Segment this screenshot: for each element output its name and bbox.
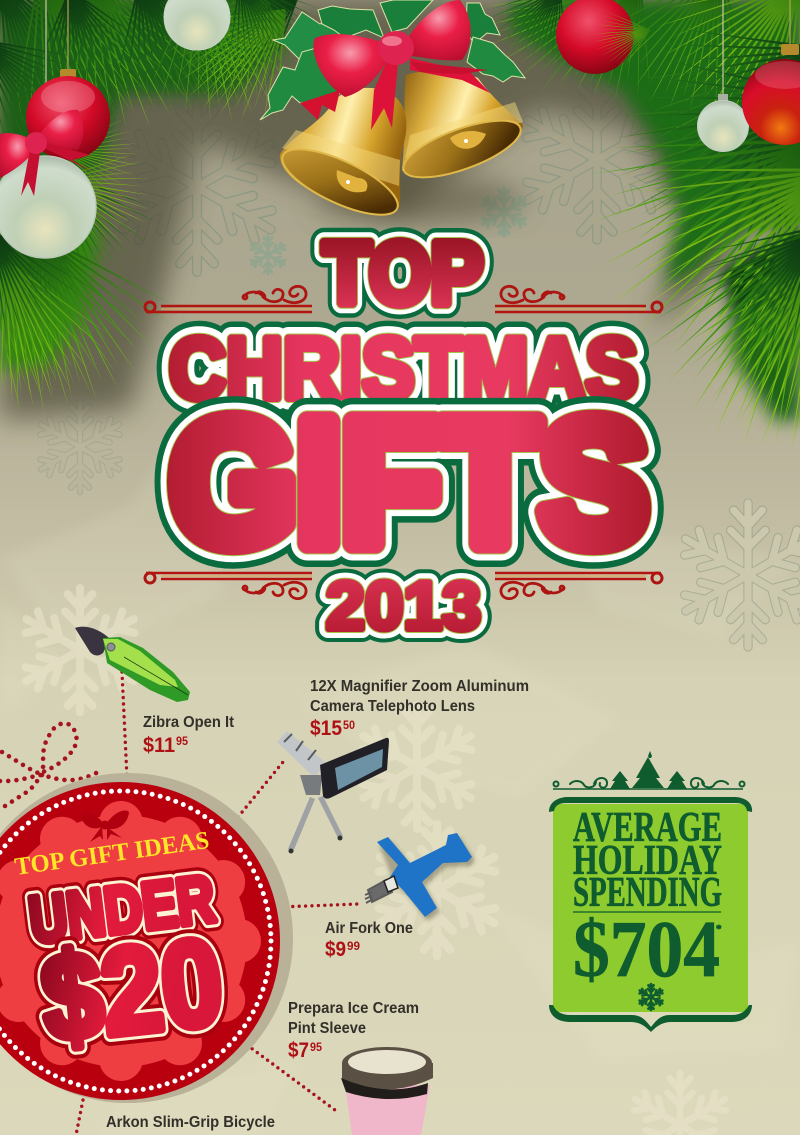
pine branches: top left <box>0 0 341 200</box>
scalloped inner panel <box>0 801 261 1081</box>
text: AVERAGE HOLIDAY SPENDING: HOLIDAY <box>573 838 722 884</box>
heading: CHRISTMAS: CHRISTMAS <box>169 321 638 417</box>
card bottom frame <box>549 1005 752 1032</box>
label: lens: Camera Telephoto Lens <box>310 698 475 715</box>
title: TOP CHRISTMAS GIFTS 2013 <box>169 225 648 644</box>
label: Zibra Open It: $11 <box>143 734 175 757</box>
heading: GIFTS: GIFTS <box>170 385 648 581</box>
label: Air Fork One: 99 <box>347 941 360 953</box>
label: Air Fork One: $9 <box>325 938 346 961</box>
holly leaves <box>260 0 525 120</box>
text: AVERAGE HOLIDAY SPENDING <box>573 805 722 916</box>
text: UNDER: UNDER <box>25 861 219 957</box>
label: Prepara Ice Cream Pint Sleeve: Pint Sleeve <box>288 1020 366 1037</box>
label: Prepara Ice Cream Pint Sleeve <box>288 1000 419 1062</box>
ornament: silver ball left <box>0 156 96 258</box>
bell: left <box>274 88 406 228</box>
heading: GIFTS: GIFTS <box>170 385 648 581</box>
text: $20: $20 <box>35 913 229 1067</box>
shadows under foliage <box>0 0 800 420</box>
badge: top gift ideas under $20 <box>0 773 293 1103</box>
label: lens: 50 <box>343 720 355 732</box>
text: TOP GIFT IDEAS: TOP GIFT IDEAS <box>13 827 211 881</box>
label: Prepara Ice Cream Pint Sleeve: $7 <box>288 1039 309 1062</box>
dotted connectors <box>76 672 358 1135</box>
label: Arkon: Arkon Slim-Grip Bicycle <box>106 1114 275 1131</box>
product: air fork one <box>365 833 475 921</box>
heading: TOP: TOP <box>323 225 483 322</box>
label: Prepara Ice Cream Pint Sleeve: 95 <box>310 1042 323 1054</box>
heading: CHRISTMAS: CHRISTMAS <box>169 321 638 417</box>
icon: snowflake <box>638 984 664 1010</box>
card top frame <box>549 797 752 812</box>
label: Zibra Open It <box>143 714 235 757</box>
text: UNDER: UNDER <box>25 861 219 957</box>
ornament: silver ball right <box>698 94 748 152</box>
heading: TOP: TOP <box>323 225 483 322</box>
icon: bow <box>81 810 129 842</box>
product: pruner <box>75 627 190 702</box>
label: Zibra Open It: 95 <box>176 736 189 748</box>
heading: GIFTS: GIFTS <box>170 385 648 581</box>
product: ice cream pint sleeve <box>341 1047 433 1135</box>
red bow on bells <box>300 0 490 130</box>
panel: average holiday spending <box>549 751 752 1032</box>
heading: CHRISTMAS: CHRISTMAS <box>169 321 638 417</box>
heading: TOP: TOP <box>323 225 483 322</box>
heading: 2013: 2013 <box>326 568 481 644</box>
ornament strings <box>46 0 790 130</box>
pine branches: lower right <box>621 172 800 487</box>
ribbon: dotted bow above badge <box>0 723 100 806</box>
text: asterisk: * <box>716 923 722 935</box>
ornament: red ball top right <box>556 0 658 76</box>
text: AVERAGE HOLIDAY SPENDING: AVERAGE <box>573 805 722 851</box>
bell: right <box>397 71 527 189</box>
card panel <box>553 804 748 1012</box>
ornament: red-orange ball right <box>742 44 800 145</box>
label: lens: $15 <box>310 717 342 740</box>
text: $20: $20 <box>35 913 229 1067</box>
label: Air Fork One: Air Fork One <box>325 920 413 937</box>
ornament: red bow left <box>0 110 93 196</box>
heading: 2013: 2013 <box>326 568 481 644</box>
heading: 2013: 2013 <box>326 568 481 644</box>
heading: 2013: 2013 <box>326 568 481 644</box>
label: Air Fork One <box>325 920 413 961</box>
text: $20: $20 <box>35 913 229 1067</box>
ornament: red ball left <box>26 69 110 160</box>
label: lens: 12X Magnifier Zoom Aluminum <box>310 678 529 695</box>
text: $704: $704 <box>573 906 720 994</box>
text: UNDER: UNDER <box>25 861 219 957</box>
icon: trees and scrolls <box>553 751 744 789</box>
pine branches: top right <box>462 0 800 430</box>
label: Zibra Open It: Zibra Open It <box>143 714 235 731</box>
heading: TOP: TOP <box>323 225 483 322</box>
label: Prepara Ice Cream Pint Sleeve: Prepara Ice Cream <box>288 1000 419 1017</box>
heading: CHRISTMAS: CHRISTMAS <box>169 321 638 417</box>
product: telephoto lens on phone <box>277 731 389 854</box>
heading: GIFTS: GIFTS <box>170 385 648 581</box>
label: lens <box>310 678 529 740</box>
title ornament rules <box>145 286 662 599</box>
ornament: silver ball top <box>164 0 230 50</box>
background texture <box>0 420 800 1135</box>
pine branches: lower left <box>0 106 195 434</box>
bells shadow <box>315 176 525 224</box>
text: AVERAGE HOLIDAY SPENDING: SPENDING <box>573 870 722 916</box>
